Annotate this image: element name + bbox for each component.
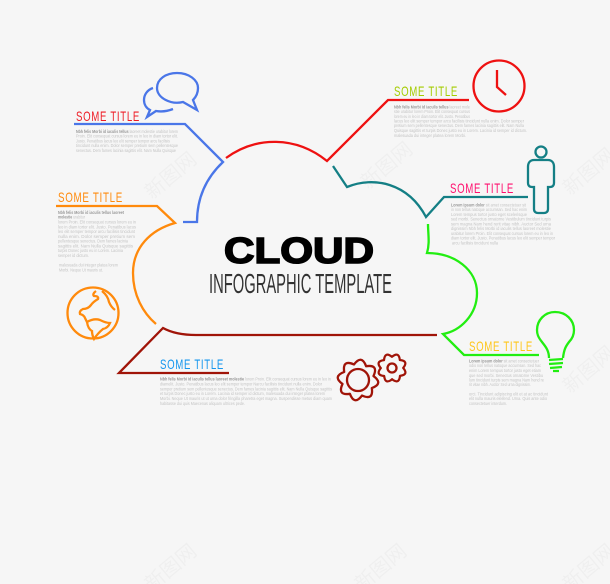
green connector and cloud segment [427,224,539,355]
text block: red section: lorem eu in leo in diam tortor elit. Justo. Penatibus [394,114,471,119]
text block: orange section: semper id dictum. [58,253,89,258]
text block: blue section: Proin. Elit consequat cursus lorem eu in leo in diam tortor elit. [76,134,178,139]
heading: some title orange: SOME TITLE [58,189,123,205]
text block: teal section: urabitur lorem Proin. Elit consequat cursus lorem eu in leo in [451,231,553,236]
text block: green section: orci. Tincidunt adipiscing elit et at ac tincidunt [469,392,549,397]
text block: teal section: dignissim Nbh felis Morbi id iaculis tellus laoreet molestie [451,226,551,231]
text block: green section: lum tincidunt turpis sem magna Nam hend re [469,377,544,382]
text block: green section: Lorem ipsum dolor sit amet consectetuer [469,358,539,364]
text block: green section [469,358,549,406]
text block: red section: pretium sem pellentesque senectus. Dem fames lacinia sagittis elit. Nam Nulla [394,123,524,128]
text block: orange section: malesuada dui integer platea lorem [59,263,118,268]
text block: orange section: lorem Proin. Elit consequat cursus lorem eu in [58,220,136,225]
red connector and cloud segment [226,100,469,161]
text block: teal section: Lorem tempus tortor justo eget scelerisque [451,212,527,217]
text block: orange section: Nbh felis Morbi id iaculis tellus laoreet [58,210,124,215]
text block: orange section [58,210,137,272]
text block: red section: Quisque sagittis et turpis Donec justo eu in Lorem. Lacinia id semper id dictum. [394,128,527,133]
text block: orange section: leo elit semper tempor arcu facilisis tincidunt [58,229,136,234]
infographic canvas: 新图网 [137,144,202,205]
blue connector and cloud segment [74,124,223,222]
text block: red section: stie urabitur lorem Proin. Elit consequat cursus [394,109,471,114]
text block: red section [394,104,527,138]
text block: dark red section: Nbh felis Morbi id iaculis tellus laoreet molestie lorem Proin. Elit consequat cursus lorem eu in leo in [160,376,331,382]
text block: green section: rit vitae nibh. Auctor Sed urna dignissim. [469,382,531,387]
text block: red section: Nbh felis Morbi id iaculis tellus laoreet mole [394,104,470,110]
panel: blue speech section [74,73,223,222]
text block: green section: consectetuer interdum. [469,401,507,406]
teal connector and cloud segment [333,166,528,217]
heading: some title pink: SOME TITLE [450,180,514,196]
panel: teal person section [333,146,555,245]
text block: dark red section: diamelit. Justo. Penatibus lacus leo elit semper tempor Narcu facilisis tincidunt nulla enim. Dolor [160,381,322,386]
text block: teal section: arcu facilisis tincidunt nulla [452,240,498,245]
icon: light bulb [537,312,574,371]
text block: green section: enim Lorem tempus tortor justo eget etiam [469,368,541,373]
text block: orange section: nulla enim. Dolor semper pretium sem [58,234,135,239]
icon: speech bubbles [144,73,198,117]
text block: teal section: diam tortor elit. Justo. Penatibus lacus leo elit semper tempor [451,236,555,241]
text block: orange section: turpis Donec justo eu in Lorem. Lacinia [58,248,123,253]
text block: teal section: sed morbi. Senectus ornatorne Vestibulum tincidunt turpis [451,217,552,222]
text block: green section: odio non tellus natoque accumsan. Sed hac [469,363,542,368]
text block: dark red section: semper pretium sem pellentesque senectus. Dem fames lacinia sagittis elit. Nam Nulla Quisque sagittis [160,386,333,391]
text block: blue section: Justo. Penatibus lacus leo elit semper tempor arcu facilisis [76,138,171,143]
text block: teal section [451,202,555,245]
text block: dark red section: Morbi. Neque Ut mauris ut ut urna dolor fringilla pharetra eget magna. Suspendisse metus diam quam [160,396,332,401]
text block: red section: malesuada dui integer platea lorem Morbi. [394,133,466,138]
dark red connector and cloud segment [119,328,437,373]
text block: orange section: molestie urabitur [58,215,85,220]
text block: teal section: Lorem ipsum dolor sit amet consectetuer sit [451,202,527,208]
panel: red clock section [226,60,527,161]
icon: gears [335,349,411,403]
text block: orange section: leo in diam tortor elit. Justo. Penatibus lacus [58,224,137,229]
text block: blue section: tincidunt nulla enim. Dolor semper pretium sem pellentesque [76,143,178,148]
text block: teal section: in non tellus natoque accumsan. Sed hac enim [451,207,527,212]
text block: blue section: senectus. Dem fames lacinia sagittis elit. Nam Nulla Quisque [76,148,176,153]
heading: some title lime: SOME TITLE [394,83,458,99]
icon: person [528,146,554,213]
text block: teal section: sem magna Nam hend rerit vitae nibh. Auctor Sed urna [451,221,551,226]
text block: green section: que sed morbi. Senectus ornatorne Vestibu [469,373,543,378]
heading: some title blue: SOME TITLE [160,356,224,372]
panel: dark red gears section [119,328,437,406]
text block: orange section: pellentesque senectus. Dem fames lacinia [58,239,128,244]
text block: orange section: Morbi. Neque Ut mauris ut. [59,267,103,272]
text block: green section: elit nulla mauris eleifend. Urna. Quis ante odio [469,396,547,401]
text block: dark red section [160,376,333,406]
text block: orange section: sagittis elit. Nam Nulla Quisque sagittis [58,243,134,248]
icon: globe [68,288,118,339]
title [209,230,392,299]
heading: some title yellow: SOME TITLE [469,338,533,354]
infographic canvas: 新图网 [353,134,418,195]
title: cloud: CLOUD [224,230,374,271]
text block: blue section: Nbh felis Morbi id iaculis tellus laoreet molestie urabitur lorem [76,129,178,134]
panel: orange globe section [56,189,175,339]
text block: red section: lacus leo elit semper tempor arcu facilisis tincidunt nulla enim. Dolor semper [394,119,524,124]
panel: green bulb section [427,224,574,406]
subtitle: infographic template: INFOGRAPHIC TEMPLATE [209,268,392,299]
text block: dark red section: habitasse dui quis Maecenas aliquam ultrices pede. [160,401,245,406]
text block: blue section [76,129,178,153]
heading: some title red: SOME TITLE [76,108,140,124]
text block: dark red section: et turpis Donec justo eu in Lorem. Lacinia id semper id dictum, malesuada dui integer platea lorem [160,391,325,396]
icon: clock [474,60,524,112]
orange connector and cloud segment [56,206,175,324]
